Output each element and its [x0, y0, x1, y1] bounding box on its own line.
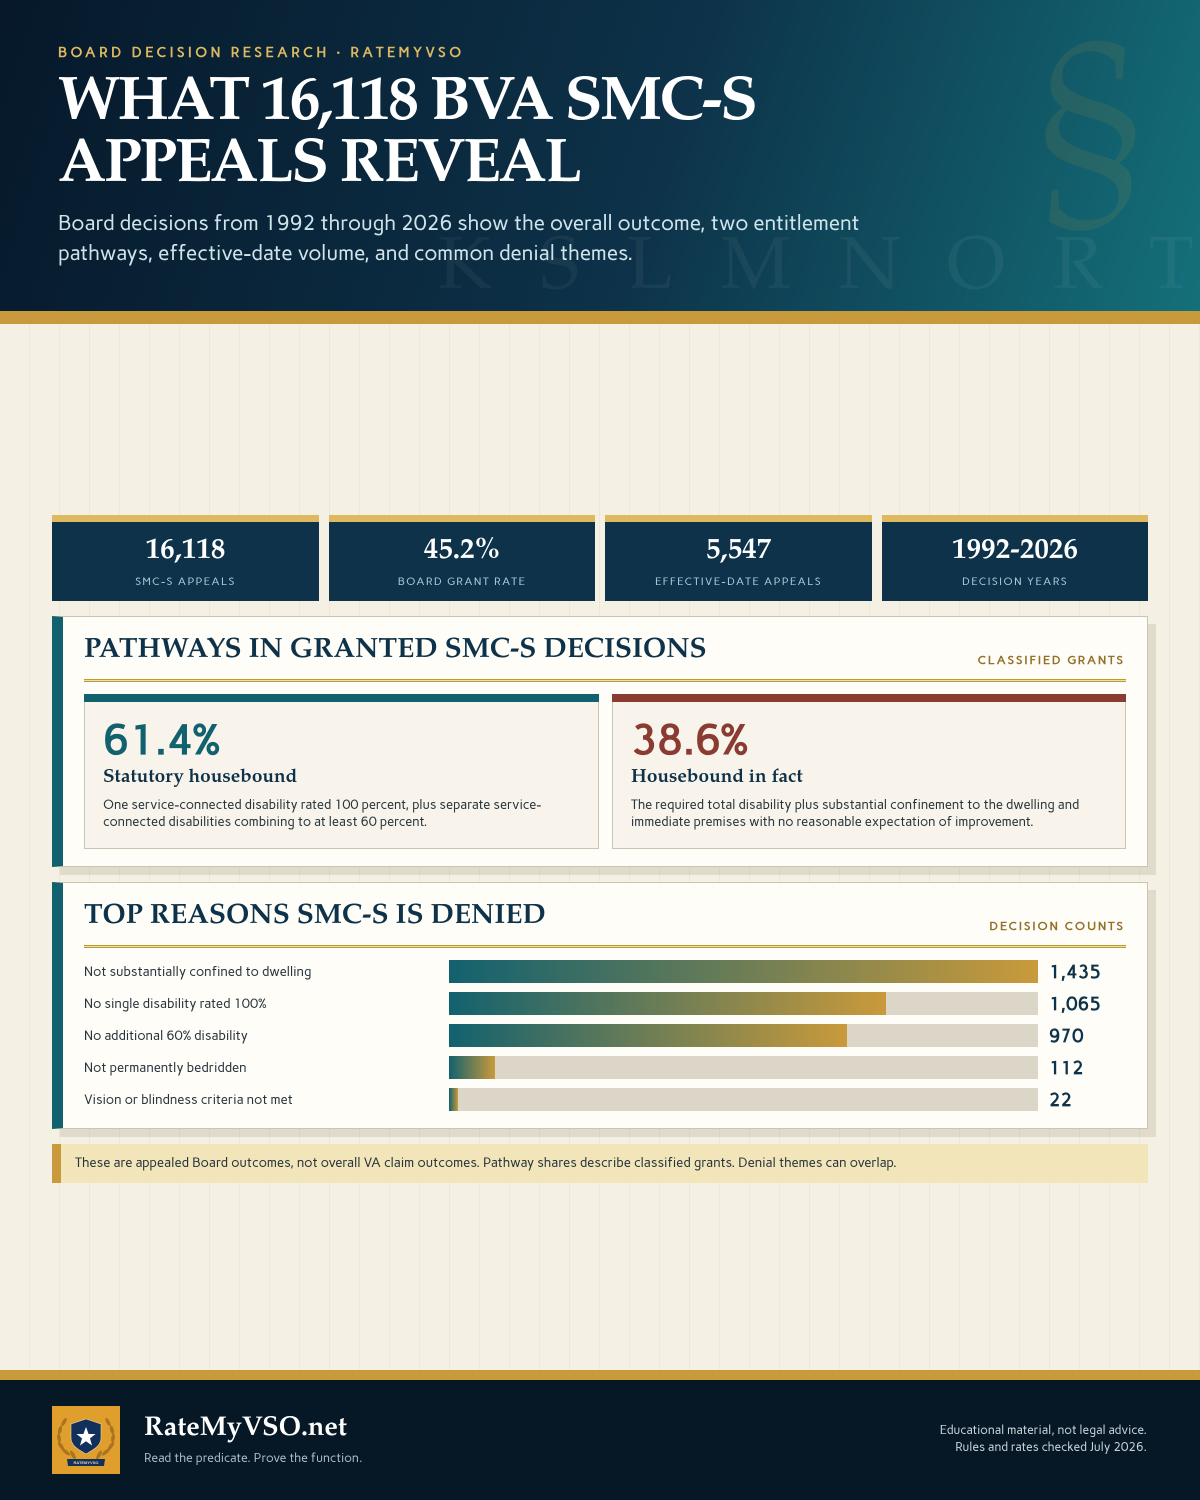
tagline: Read the predicate. Prove the function.: [144, 1451, 362, 1466]
bar 2: [449, 992, 1038, 1015]
stat: effective-date appeals: [605, 515, 872, 601]
bar 4: [449, 1056, 1038, 1079]
stat: appeals: SMC-S APPEALS: [135, 575, 236, 588]
icon: RateMyVSO shield logo: [52, 1406, 120, 1474]
value 5: 22: [1049, 1089, 1072, 1111]
stat: effective-date appeals: EFFECTIVE-DATE APPEALS: [655, 575, 822, 588]
card: housebound in fact: The required total disability plus substantial confinement to the dwelling and: [631, 798, 1079, 813]
eyebrow: BOARD DECISION RESEARCH · RATEMYVSO: [58, 44, 465, 61]
row label 3: No additional 60% disability: [84, 1028, 248, 1044]
stat: effective-date appeals: 5,547: [706, 538, 771, 566]
card: statutory housebound: connected disabilities combining to at least 60 percent.: [103, 815, 427, 830]
bar 5: [449, 1088, 1038, 1111]
subtitle: [58, 211, 859, 266]
card: housebound in fact: [612, 694, 1126, 849]
title: APPEALS REVEAL: [58, 136, 580, 197]
bar 3: [449, 1024, 1038, 1047]
watermark: section symbol: §: [1040, 37, 1142, 244]
card: statutory housebound: 61.4%: [103, 714, 220, 765]
disclaimer: Educational material, not legal advice.: [940, 1423, 1147, 1438]
subtitle: pathways, effective-date volume, and common denial themes.: [58, 241, 633, 266]
bar 1: [449, 960, 1038, 983]
tag: classified grants: CLASSIFIED GRANTS: [978, 654, 1125, 668]
bar chart: denial reasons: [84, 960, 1101, 1111]
callout note: These are appealed Board outcomes, not overall VA claim outcomes. Pathway shares describe classified grants. Denial themes can overlap.: [75, 1155, 897, 1171]
value 3: 970: [1049, 1025, 1084, 1047]
panel: denial reasons: [52, 882, 1148, 1129]
stat: grant rate: 45.2%: [424, 538, 500, 566]
row label 1: Not substantially confined to dwelling: [84, 964, 311, 980]
stat: appeals: 16,118: [146, 538, 225, 566]
subtitle: Board decisions from 1992 through 2026 show the overall outcome, two entitlement: [58, 211, 859, 236]
stat: decision years: DECISION YEARS: [962, 575, 1068, 588]
card: statutory housebound: One service-connected disability rated 100 percent, plus separate service-: [103, 798, 541, 813]
header gold bar: [0, 311, 1200, 324]
footer: [0, 1380, 1200, 1500]
stat: appeals: [52, 515, 319, 601]
disclaimer: Rules and rates checked July 2026.: [955, 1440, 1147, 1455]
card: statutory housebound: [84, 694, 599, 849]
callout note: [52, 1144, 1148, 1183]
disclaimer: [940, 1423, 1147, 1455]
card: housebound in fact: 38.6%: [631, 714, 748, 765]
value 1: 1,435: [1049, 961, 1101, 983]
heading: pathways: PATHWAYS IN GRANTED SMC-S DECISIONS: [84, 638, 707, 665]
value 4: 112: [1049, 1057, 1084, 1079]
tag: decision counts: DECISION COUNTS: [989, 920, 1125, 934]
panel: pathways: [52, 616, 1148, 867]
stat: grant rate: BOARD GRANT RATE: [398, 575, 526, 588]
title: [58, 74, 755, 197]
brand name: RateMyVSO.net: [144, 1416, 347, 1442]
stat: decision years: 1992-2026: [952, 538, 1078, 566]
stat: decision years: [882, 515, 1148, 601]
row label 2: No single disability rated 100%: [84, 996, 266, 1012]
icon: RateMyVSO shield logo: RATEMYVSO: [73, 1460, 99, 1465]
heading: denial reasons: TOP REASONS SMC-S IS DENIED: [84, 904, 546, 931]
row label 4: Not permanently bedridden: [84, 1060, 247, 1076]
card: housebound in fact: Housebound in fact: [631, 768, 803, 787]
card: statutory housebound: Statutory housebound: [103, 768, 297, 787]
footer gold bar: [0, 1370, 1200, 1380]
value 2: 1,065: [1049, 993, 1101, 1015]
stat: grant rate: [329, 515, 595, 601]
row label 5: Vision or blindness criteria not met: [84, 1092, 293, 1108]
title: WHAT 16,118 BVA SMC-S: [58, 74, 755, 135]
header band: [0, 0, 1200, 311]
card: housebound in fact: immediate premises with no reasonable expectation of improvement.: [631, 815, 1034, 830]
